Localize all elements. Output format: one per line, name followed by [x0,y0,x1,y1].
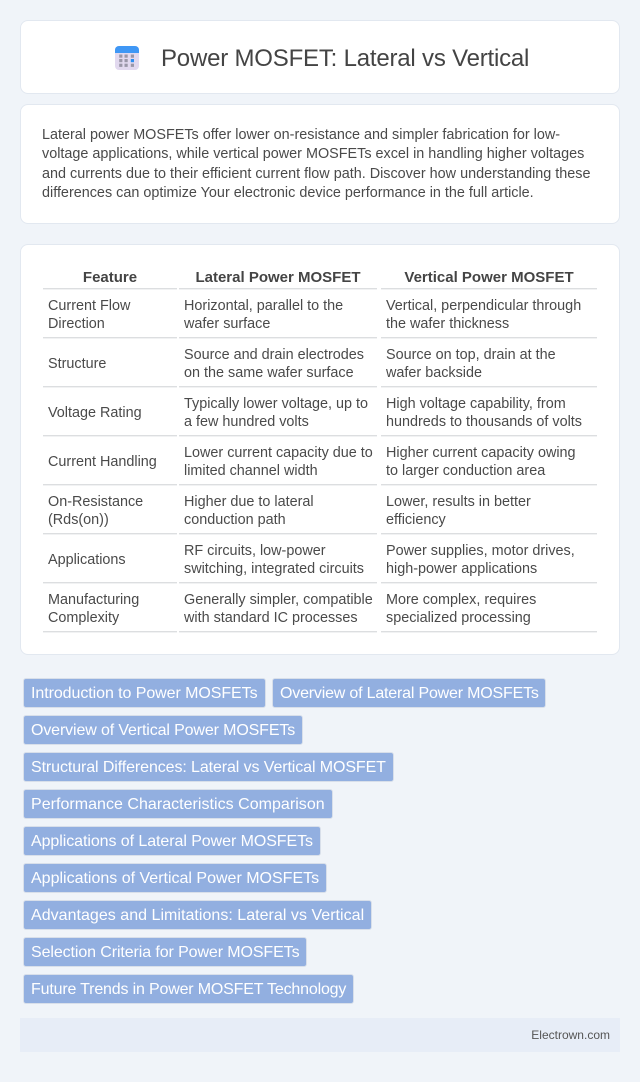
comparison table: On-Resistance [48,494,143,510]
intro paragraph [42,127,590,201]
tag: structural differences [23,752,394,782]
tag: future trends [23,974,354,1004]
tag: performance: Performance Characteristics Comparison [31,796,325,813]
comparison table panel [20,244,620,655]
comparison table: with standard IC processes [184,610,358,626]
tag: introduction: Introduction to Power MOSFETs [31,685,258,702]
tag: introduction [23,678,266,708]
comparison table: Direction [48,316,105,332]
intro paragraph: Lateral power MOSFETs offer lower on-resistance and simpler fabrication for low- [42,127,560,143]
comparison table: Source on top, drain at the [386,347,556,363]
comparison table: Source and drain electrodes [184,347,364,363]
icon: calendar [115,46,139,70]
tag: vertical applications [23,863,327,893]
table header: feature: Feature [83,269,137,286]
comparison table: conduction path [184,512,286,528]
tag: lateral overview: Overview of Lateral Power MOSFETs [280,685,539,702]
comparison table: High voltage capability, from [386,396,566,412]
tag: structural differences: Structural Differences: Lateral vs Vertical MOSFET [31,759,386,776]
comparison table: Current Handling [48,454,157,470]
table header: vertical: Vertical Power MOSFET [404,269,574,286]
comparison table: efficiency [386,512,446,528]
comparison table: Lower, results in better [386,494,531,510]
intro paragraph: differences can optimize Your electronic device performance in the full article. [42,185,534,201]
intro paragraph: and currents due to their efficient current flow path. Discover how understanding these [42,166,590,182]
comparison table: Typically lower voltage, up to [184,396,368,412]
comparison table: Generally simpler, compatible [184,592,373,608]
table header: lateral: Lateral Power MOSFET [195,269,361,286]
comparison table: Vertical, perpendicular through [386,298,581,314]
comparison table: Horizontal, parallel to the [184,298,343,314]
comparison table: high-power applications [386,561,537,577]
tag: advantages [23,900,372,930]
tag: selection: Selection Criteria for Power MOSFETs [31,944,299,961]
comparison table: Higher current capacity owing [386,445,576,461]
comparison table: More complex, requires [386,592,536,608]
footer credit: Electrown.com [531,1028,610,1042]
tag: lateral overview [272,678,546,708]
tag: selection [23,937,307,967]
tag: advantages: Advantages and Limitations: Lateral vs Vertical [31,907,364,924]
comparison table: (Rds(on)) [48,512,109,528]
comparison table: specialized processing [386,610,531,626]
tag: performance [23,789,333,819]
tag: future trends: Future Trends in Power MOSFET Technology [31,981,346,998]
tag: vertical overview: Overview of Vertical Power MOSFETs [31,722,295,739]
comparison table: hundreds to thousands of volts [386,414,582,430]
tag: vertical overview [23,715,303,745]
comparison table [43,269,597,633]
comparison table: Complexity [48,610,119,626]
intro paragraph: voltage applications, while vertical power MOSFETs excel in handling higher voltages [42,146,584,162]
title: Power MOSFET: Lateral vs Vertical [161,45,529,72]
comparison table: Voltage Rating [48,405,142,421]
footer [20,1018,620,1052]
comparison table: Manufacturing [48,592,139,608]
comparison table: RF circuits, low-power [184,543,326,559]
comparison table: wafer surface [184,316,270,332]
comparison table: Lower current capacity due to [184,445,373,461]
tag: vertical applications: Applications of Vertical Power MOSFETs [31,870,319,887]
topic tags [23,678,546,1004]
comparison table: on the same wafer surface [184,365,354,381]
comparison table: to larger conduction area [386,463,545,479]
comparison table: switching, integrated circuits [184,561,364,577]
comparison table: a few hundred volts [184,414,309,430]
tag: lateral applications: Applications of Lateral Power MOSFETs [31,833,313,850]
comparison table: Higher due to lateral [184,494,314,510]
comparison table: Current Flow [48,298,130,314]
comparison table: limited channel width [184,463,318,479]
comparison table: Applications [48,552,126,568]
comparison table: the wafer thickness [386,316,509,332]
comparison table: Structure [48,356,106,372]
tag: lateral applications [23,826,321,856]
intro text card [20,104,620,224]
header card [20,20,620,94]
comparison table: Power supplies, motor drives, [386,543,575,559]
comparison table: wafer backside [386,365,482,381]
